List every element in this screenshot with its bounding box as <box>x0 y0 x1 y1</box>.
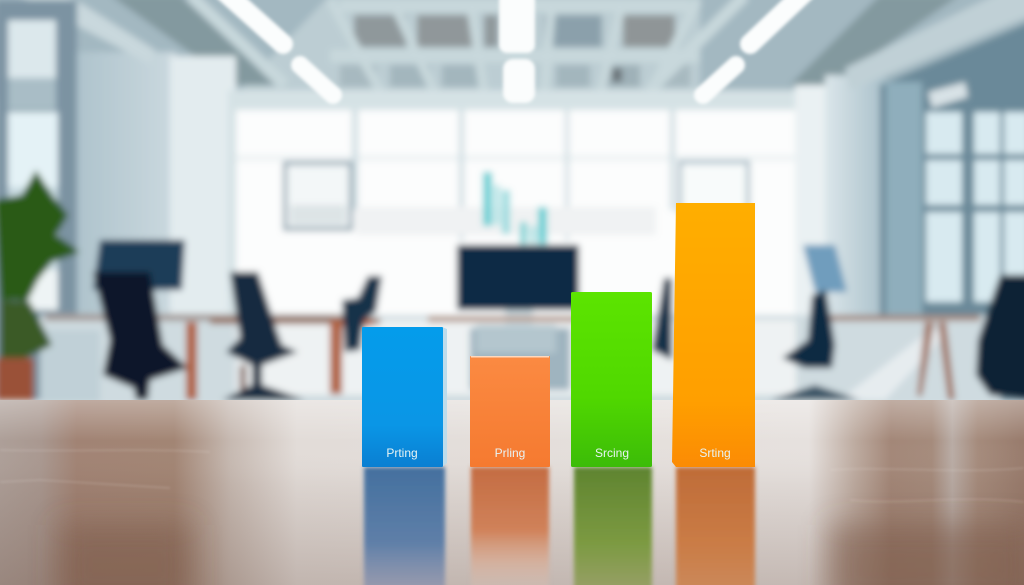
chairs <box>93 272 1024 400</box>
bar: blue block <box>362 327 447 467</box>
chair right <box>782 290 835 368</box>
ceiling lights <box>225 0 805 103</box>
left window <box>0 0 77 400</box>
label: orange: Prling <box>495 446 525 460</box>
desks <box>45 314 980 324</box>
plant stem <box>20 240 25 360</box>
chair left <box>93 272 188 400</box>
wood grain <box>0 450 1024 502</box>
window frame right <box>680 162 748 212</box>
table surface <box>0 400 1024 585</box>
desk legs <box>186 320 955 400</box>
reflection: blue <box>364 467 445 585</box>
chair right-middle <box>342 276 382 352</box>
reflections <box>364 467 755 585</box>
chair behind amber <box>652 278 672 360</box>
label: blue: Prting <box>386 446 418 460</box>
back wall frame <box>228 90 828 400</box>
right soffit <box>845 0 1024 90</box>
plant <box>0 170 80 400</box>
label: amber: Srting <box>699 446 731 460</box>
bar: orange block <box>470 356 550 467</box>
window frame left <box>285 163 351 229</box>
large window <box>236 110 796 320</box>
right monitor <box>803 245 847 292</box>
reflection: orange <box>471 467 549 585</box>
chair middle <box>222 272 305 400</box>
floor strip <box>40 315 1000 405</box>
label: green: Srcing <box>595 446 629 460</box>
centre monitor <box>457 245 579 310</box>
reflection: amber <box>676 467 755 585</box>
left soffit <box>10 0 155 64</box>
ceiling beams <box>190 0 745 100</box>
teal screen chart <box>483 172 547 244</box>
plant leaves <box>0 170 80 300</box>
right wall <box>795 85 825 325</box>
bar: green block <box>571 292 652 467</box>
ceiling <box>0 0 1024 100</box>
blurred office background <box>0 0 1024 405</box>
left monitor <box>93 240 185 290</box>
bar: amber block <box>672 203 755 467</box>
reflection: green <box>574 467 652 585</box>
left wall <box>76 52 176 402</box>
chair far right <box>976 275 1024 400</box>
ceiling tiles <box>110 0 960 87</box>
right window wall <box>880 20 1024 400</box>
plant pot <box>0 358 34 400</box>
